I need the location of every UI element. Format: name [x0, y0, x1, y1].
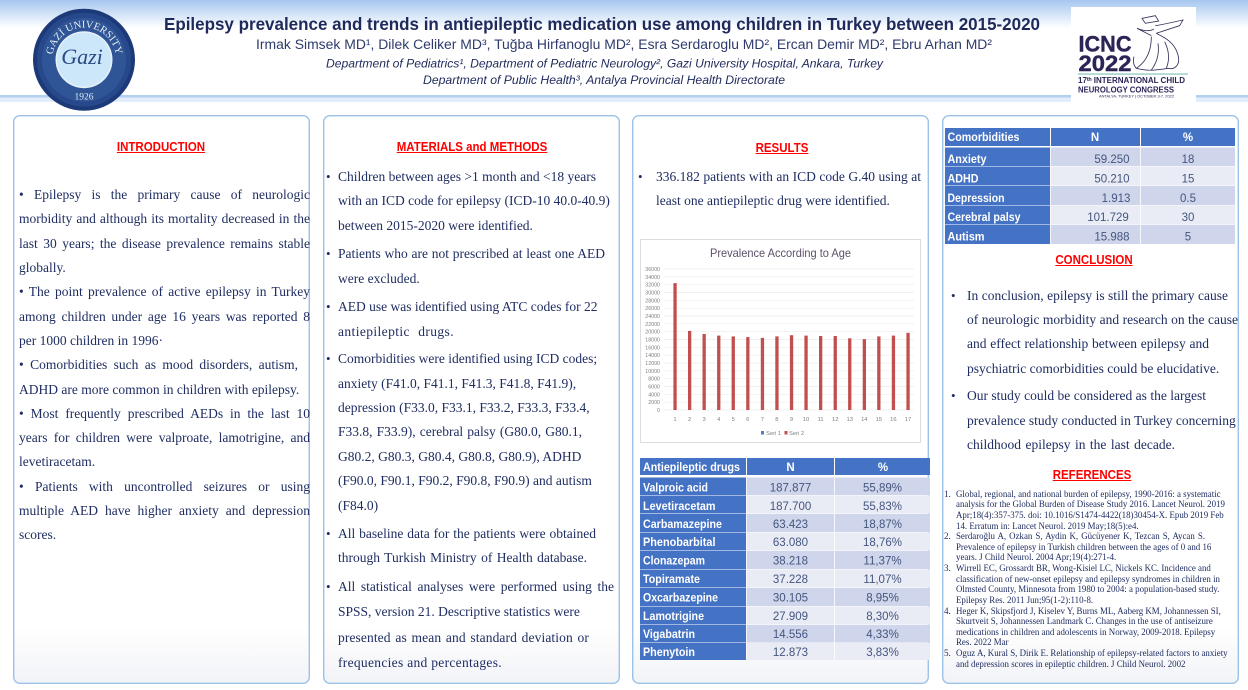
text block: methods bullets: Children between ages >1 month and <18 years [338, 169, 596, 184]
y axis labels: 36000 [645, 267, 660, 273]
text block: results summary [638, 169, 921, 208]
text block: methods bullets: presented as mean and standard deviation or [338, 630, 589, 645]
table header [640, 458, 930, 475]
logo: ICNC 2022: NEUROLOGY CONGRESS [1078, 85, 1175, 94]
text block: conclusion bullets: In conclusion, epilepsy is still the primary cause [967, 288, 1228, 303]
text block: references list: 5. [944, 648, 951, 658]
x axis labels: 3 [702, 417, 706, 423]
x axis labels: 10 [803, 417, 809, 423]
x axis labels: 13 [846, 417, 853, 423]
text block: introduction bullets [19, 187, 310, 542]
row: phenobarbital [640, 532, 930, 550]
y axis labels: 22000 [645, 322, 660, 328]
text block: conclusion bullets: prevalence study conducted in Turkey concerning [967, 413, 1236, 428]
text block: references list: Wirrell EC, Grossardt BR, Wong-Kisiel LC, Nickels KC. Incidence and [956, 563, 1211, 573]
row: depression: 0.5 [1180, 193, 1196, 205]
row: valproic acid [640, 478, 930, 495]
text block: conclusion bullets: Our study could be considered as the largest [967, 388, 1206, 403]
row: phenobarbital: 18,76% [863, 537, 902, 549]
text block: methods bullets: • [326, 579, 331, 594]
y axis labels: 18000 [645, 338, 660, 344]
text block: introduction bullets: scores. [19, 527, 56, 542]
text block: introduction bullets: years for children were valproate, lamotrigine, and [19, 430, 310, 445]
x axis labels: 8 [775, 417, 779, 423]
text block: conclusion bullets: psychiatric comorbidities could be elucidative. [967, 361, 1219, 376]
text block: references list: 2. [944, 531, 951, 541]
x axis labels: 5 [732, 417, 735, 423]
row: topiramate [640, 570, 930, 588]
panel: introduction [13, 115, 310, 684]
row: adhd: 50.210 [1094, 174, 1130, 186]
row: levetiracetam: 55,83% [863, 501, 902, 513]
y axis labels: 4000 [648, 392, 660, 398]
text block: methods bullets: SPSS, version 21. Descriptive statistics were [338, 604, 580, 619]
row: phenytoin: Phenytoin [643, 647, 695, 659]
row: oxcarbazepine: 8,95% [866, 592, 899, 604]
row: oxcarbazepine: Oxcarbazepine [643, 592, 718, 604]
text block: references list: Epilepsy Res. 2011 Jun;95(1-2):110-8. [956, 595, 1093, 605]
table header [945, 128, 1235, 146]
text block: introduction bullets: • Epilepsy is the primary cause of neurologic [19, 187, 310, 202]
row: phenytoin: 12.873 [773, 647, 808, 659]
y axis labels [645, 267, 660, 414]
text block: methods bullets: • [326, 169, 331, 184]
logo: ICNC 2022: 17ᵗʰ INTERNATIONAL CHILD [1078, 76, 1185, 85]
row: vigabatrin [640, 625, 930, 642]
chart title: Prevalence According to Age [710, 246, 851, 260]
x axis labels: 2 [688, 417, 691, 423]
table header: % [1183, 132, 1193, 144]
bar chart: prevalence according to age [640, 239, 921, 443]
logo: ICNC 2022: 2022 [1078, 51, 1132, 76]
row: adhd: 15 [1182, 174, 1194, 186]
logo: Gazi University: Gazi [61, 44, 103, 69]
header band [0, 0, 1248, 111]
x axis labels [673, 417, 911, 423]
text block: results summary: • [638, 169, 643, 184]
text block: methods bullets: G80.2, G80.3, G80.4, G80.8, G80.9), ADHD [338, 449, 581, 464]
row: lamotrigine: 27.909 [773, 611, 808, 623]
text block: methods bullets: • [326, 351, 331, 366]
affiliations: Department of Pediatrics¹, Department of Pediatric Neurology², Gazi University Hospital, Ankara, Turkey [326, 56, 884, 70]
chart legend [761, 431, 804, 437]
x axis labels: 7 [761, 417, 764, 423]
text block: methods bullets: antiepileptic drugs. [338, 324, 454, 339]
y axis labels: 32000 [645, 283, 660, 289]
row: clonazepam: 38.218 [773, 556, 808, 568]
bars: seri 2 [673, 283, 910, 410]
row: vigabatrin: 14.556 [773, 629, 808, 641]
row: clonazepam: 11,37% [863, 556, 902, 568]
heading: conclusion: CONCLUSION [1055, 253, 1133, 267]
row: phenytoin: 3,83% [866, 647, 899, 659]
x axis labels: 17 [905, 417, 911, 423]
row: anxiety: 59.250 [1094, 154, 1130, 166]
text block: methods bullets: frequencies and percentages. [338, 655, 502, 670]
row: autism: 15.988 [1094, 232, 1130, 244]
row: lamotrigine: 8,30% [866, 611, 899, 623]
row: carbamazepine: 63.423 [773, 519, 808, 531]
logo: ICNC 2022 [1071, 7, 1196, 102]
logo: ICNC 2022: ANTALYA, TURKEY | OCTOBER 3-7, 2022 [1099, 94, 1174, 98]
row: valproic acid: Valproic acid [643, 482, 708, 494]
text block: references list: years. J Child Neurol. 2004 Apr;19(4):271-4. [956, 552, 1116, 562]
row: lamotrigine [640, 606, 930, 624]
row: autism: Autism [948, 232, 984, 244]
y axis labels: 6000 [648, 384, 660, 390]
text block: methods bullets: between 2015-2020 were identified. [338, 218, 533, 233]
text block: references list: Skurtveit S, Johannessen Landmark C. Changes in the use of antiseizure [956, 616, 1213, 626]
row: depression: 1.913 [1102, 193, 1130, 205]
text block: methods bullets: depression (F33.0, F33.1, F33.2, F33.3, F33.4, [338, 400, 590, 415]
authors: Irmak Simsek MD¹, Dilek Celiker MD³, Tuğba Hirfanoglu MD², Esra Serdaroglu MD², Ercan Demir MD², Ebru Arhan MD² [256, 37, 993, 52]
x axis labels: 16 [890, 417, 897, 423]
text block: methods bullets: • [326, 299, 331, 314]
heading: references: REFERENCES [1053, 468, 1131, 482]
row: clonazepam: Clonazepam [643, 556, 705, 568]
row: topiramate: 11,07% [863, 574, 902, 586]
x axis labels: 4 [717, 417, 721, 423]
title: Epilepsy prevalence and trends in antiepileptic medication use among children in Turkey between 2015-2020 [164, 14, 1040, 34]
text block: references list: 3. [944, 563, 951, 573]
row: cerebral palsy: Cerebral palsy [948, 212, 1021, 224]
row: carbamazepine: 18,87% [863, 519, 902, 531]
table header: Antiepileptic drugs [643, 462, 740, 474]
affiliations: Department of Public Health³, Antalya Provincial Health Directorate [423, 73, 785, 87]
row: phenobarbital: Phenobarbital [643, 537, 716, 549]
text block: introduction bullets: among children under age 16 years was reported 8 [19, 309, 310, 324]
text block: introduction bullets: • Patients with uncontrolled seizures or using [19, 479, 310, 494]
row: lamotrigine: Lamotrigine [643, 611, 704, 623]
text block: introduction bullets: levetiracetam. [19, 454, 95, 469]
y axis labels: 26000 [645, 306, 660, 312]
table: comorbidities [945, 128, 1235, 244]
table header: % [878, 462, 888, 474]
row: oxcarbazepine [640, 588, 930, 606]
row: topiramate: Topiramate [643, 574, 700, 586]
text block: methods bullets: Comorbidities were identified using ICD codes; [338, 351, 597, 366]
text block: references list [944, 488, 1228, 669]
chart legend: Seri 2 [789, 431, 804, 437]
text block: introduction bullets: morbidity and although its mortality decreased in the [19, 211, 310, 226]
panel: results [632, 115, 929, 684]
row: levetiracetam: Levetiracetam [643, 501, 716, 513]
text block: references list: Oguz A, Kural S, Dirik E. Relationship of epilepsy-related factors to anxiety [956, 648, 1228, 658]
x axis labels: 9 [790, 417, 793, 423]
y axis labels: 10000 [645, 369, 660, 375]
heading: results: RESULTS [756, 141, 808, 155]
row: phenytoin [640, 643, 930, 660]
y axis labels: 30000 [645, 290, 660, 296]
text block: methods bullets: Patients who are not prescribed at least one AED [338, 246, 605, 261]
text block: methods bullets: were excluded. [338, 271, 420, 286]
text block: introduction bullets: globally. [19, 260, 66, 275]
logo: ICNC 2022: ICNC [1078, 32, 1132, 57]
x axis labels: 1 [673, 417, 677, 423]
text block: references list: 14. Erratum in: Lancet Neurol. 2019 May;18(5):e4. [956, 520, 1139, 530]
text block: references list: Prevalence of epilepsy in Turkish children between the ages of 0 and 16 [956, 542, 1211, 552]
y axis labels: 12000 [645, 361, 660, 367]
row: autism: 5 [1185, 232, 1191, 244]
row: clonazepam [640, 551, 930, 569]
y axis labels: 8000 [648, 377, 660, 383]
text block: introduction bullets: • Most frequently prescribed AEDs in the last 10 [19, 406, 310, 421]
text block: references list: Serdaroğlu A, Ozkan S, Aydin K, Gücüyener K, Tezcan S, Aycan S. [956, 531, 1205, 541]
heading: introduction: INTRODUCTION [117, 140, 205, 154]
table header: N [1091, 132, 1099, 144]
text block: conclusion bullets: • [951, 288, 956, 303]
y axis labels: 34000 [645, 275, 660, 281]
table header: Comorbidities [948, 132, 1020, 144]
row: adhd: ADHD [948, 174, 978, 186]
row: valproic acid: 55,89% [863, 482, 902, 494]
text block: references list: Heger K, Skipsfjord J, Kiselev Y, Burns ML, Aaberg KM, Johannessen SI, [956, 606, 1221, 616]
row: depression [945, 186, 1235, 205]
text block: methods bullets: AED use was identified using ATC codes for 22 [338, 299, 597, 314]
row: cerebral palsy: 30 [1182, 212, 1194, 224]
heading: materials and methods: MATERIALS and METHODS [397, 140, 547, 154]
row: adhd [945, 166, 1235, 186]
table: antiepileptic drugs [640, 458, 930, 660]
panel: materials and methods [323, 115, 620, 684]
text block: introduction bullets: • The point prevalence of active epilepsy in Turkey [19, 284, 310, 299]
text block: references list: medications in children and adolescents in Norway, 2009-2018. Epilepsy [956, 627, 1215, 637]
text block: introduction bullets: per 1000 children in 1996· [19, 333, 163, 348]
text block: methods bullets: (F84.0) [338, 498, 378, 513]
text block: conclusion bullets: and effect relationship between epilepsy and [967, 336, 1209, 351]
text block: methods bullets: F33.8, F33.9), cerebral palsy (G80.0, G80.1, [338, 424, 582, 439]
text block: results summary: least one antiepileptic drug were identified. [656, 193, 890, 208]
text block: references list: Global, regional, and national burden of epilepsy, 1990-2016: a systematic [956, 488, 1221, 498]
row: anxiety [945, 148, 1235, 166]
x axis labels: 12 [832, 417, 838, 423]
row: cerebral palsy [945, 206, 1235, 224]
text block: conclusion bullets: childhood epilepsy in the last decade. [967, 437, 1175, 452]
text block: results summary: 336.182 patients with an ICD code G.40 using at [656, 169, 921, 184]
text block: references list: classification of new-onset epilepsy and epilepsy syndromes in children in [956, 574, 1220, 584]
row: carbamazepine: Carbamazepine [643, 519, 722, 531]
text block: references list: Res. 2022 Mar [956, 637, 1009, 647]
logo: Gazi University [33, 8, 135, 111]
chart legend: Seri 1 [766, 431, 781, 437]
y axis labels: 16000 [645, 345, 660, 351]
text block: references list: 1. [944, 488, 951, 498]
x axis labels: 15 [876, 417, 882, 423]
row: levetiracetam [640, 496, 930, 514]
text block: conclusion bullets [951, 288, 1238, 452]
text block: methods bullets: through Turkish Ministry of Health database. [338, 550, 587, 565]
text block: methods bullets: anxiety (F41.0, F41.1, F41.3, F41.8, F41.9), [338, 376, 576, 391]
y axis labels: 20000 [645, 330, 660, 336]
text block: methods bullets: All baseline data for the patients were obtained [338, 526, 596, 541]
y axis labels: 14000 [645, 353, 660, 359]
affiliations [326, 56, 884, 87]
panel: comorbidities, conclusion and references [942, 115, 1239, 684]
table header: N [786, 462, 795, 474]
text block: conclusion bullets: • [951, 388, 956, 403]
icon: whirling dervish [1133, 16, 1183, 70]
y axis labels: 2000 [648, 400, 660, 406]
text block: introduction bullets: ADHD are more common in children with epilepsy. [19, 382, 299, 397]
text block: methods bullets: (F90.0, F90.1, F90.2, F90.8, F90.9) and autism [338, 473, 592, 488]
row: anxiety: Anxiety [948, 154, 987, 166]
row: valproic acid: 187.877 [770, 482, 811, 494]
row: topiramate: 37.228 [773, 574, 808, 586]
row: oxcarbazepine: 30.105 [773, 592, 808, 604]
y axis labels: 24000 [645, 314, 660, 320]
text block: methods bullets [326, 169, 614, 670]
y axis labels: 0 [657, 408, 660, 414]
text block: references list: and depression scores in epileptic children. J Child Neurol. 2002 [956, 659, 1185, 669]
row: cerebral palsy: 101.729 [1087, 212, 1129, 224]
row: vigabatrin: Vigabatrin [643, 629, 695, 641]
text block: references list: analysis for the Global Burden of Disease Study 2016. Lancet Neurol. 2019 [956, 499, 1225, 509]
row: carbamazepine [640, 514, 930, 532]
text block: methods bullets: with an ICD code for epilepsy (ICD-10 40.0-40.9) [338, 193, 610, 208]
row: autism [945, 225, 1235, 244]
x axis labels: 14 [861, 417, 868, 423]
text block: references list: Apr;18(4):357-375. doi: 10.1016/S1474-4422(18)30454-X. Epub 2019 Feb [956, 510, 1224, 520]
text block: introduction bullets: • Comorbidities such as mood disorders, autism, [19, 357, 298, 372]
text block: references list: Olmsted County, Minnesota from 1980 to 2004: a population-based study. [956, 584, 1219, 594]
text block: introduction bullets: multiple AED have higher anxiety and depression [19, 503, 310, 518]
row: anxiety: 18 [1182, 154, 1194, 166]
x axis labels: 11 [818, 417, 824, 423]
logo: Gazi University: GAZİ UNIVERSITY [46, 20, 123, 54]
text block: methods bullets: All statistical analyses were performed using the [338, 579, 614, 594]
logo: Gazi University: 1926 [74, 92, 94, 102]
x axis labels: 6 [746, 417, 749, 423]
text block: methods bullets: • [326, 246, 331, 261]
text block: methods bullets: • [326, 526, 331, 541]
row: depression: Depression [948, 193, 1004, 205]
y axis labels: 28000 [645, 298, 660, 304]
row: phenobarbital: 63.080 [773, 537, 808, 549]
text block: references list: 4. [944, 606, 951, 616]
row: vigabatrin: 4,33% [866, 629, 899, 641]
text block: introduction bullets: last 30 years; the disease prevalence remains stable [19, 236, 310, 251]
text block: conclusion bullets: of neurologic morbidity and research on the cause [967, 312, 1238, 327]
row: levetiracetam: 187.700 [770, 501, 811, 513]
